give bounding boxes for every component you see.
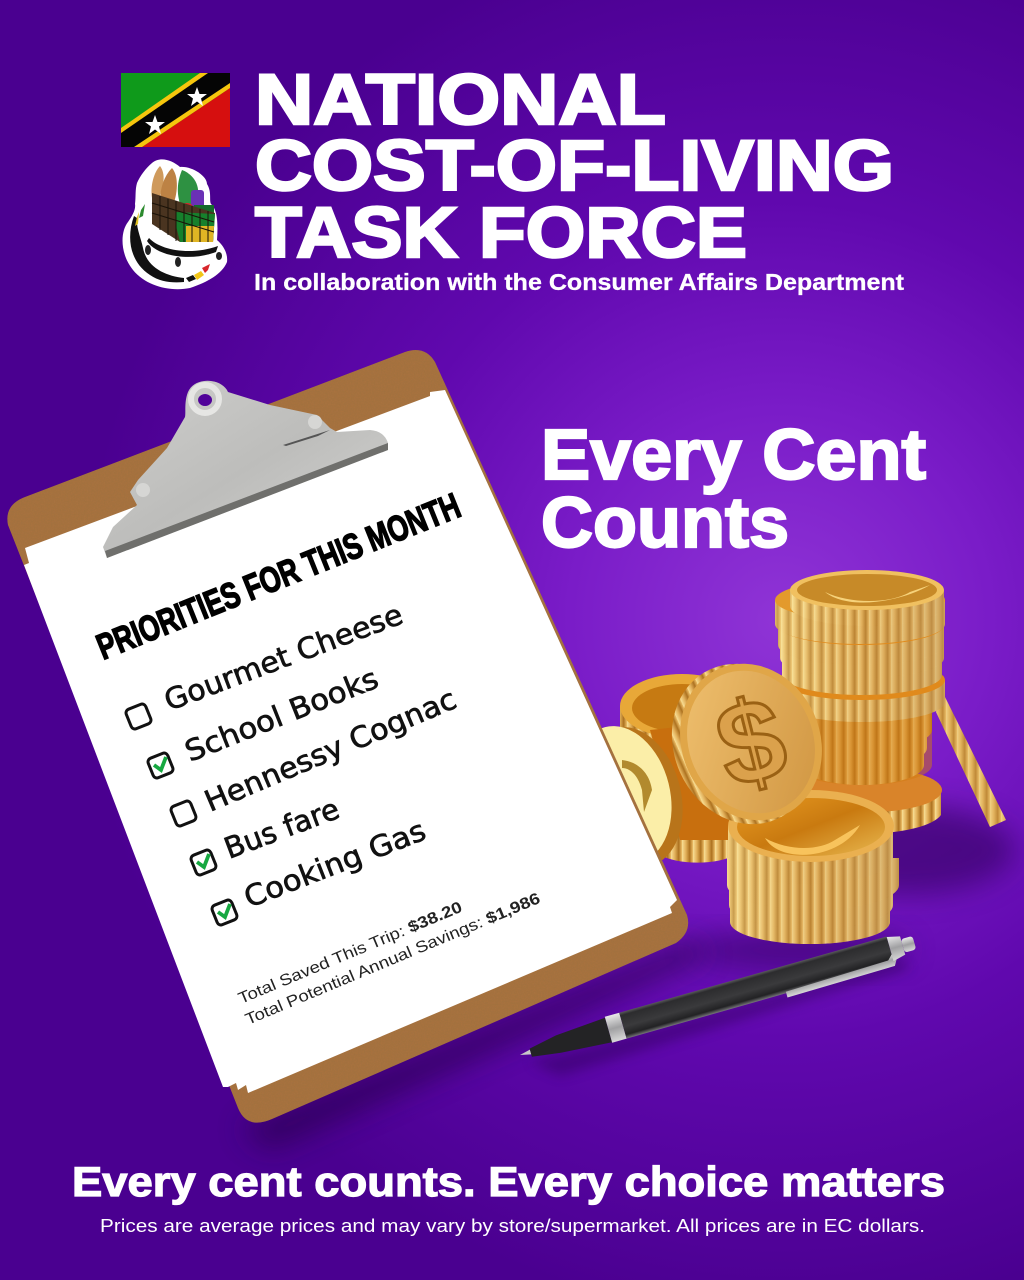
footer tagline: Every cent counts. Every choice matters	[72, 1158, 945, 1205]
header	[121, 61, 904, 295]
checklist item: School Books: School Books	[180, 661, 383, 769]
footer disclaimer: Prices are average prices and may vary by store/supermarket. All prices are in EC dollars.	[100, 1216, 925, 1236]
checklist heading: PRIORITIES FOR THIS MONTH	[91, 485, 466, 667]
coins: main tall stack	[775, 570, 945, 833]
illustration: gold coins	[558, 570, 1006, 944]
coin: large dollar coin	[647, 641, 847, 847]
clipboard paper	[24, 390, 677, 1093]
clipboard board	[7, 350, 688, 1123]
pen	[516, 930, 919, 1072]
subtitle: In collaboration with the Consumer Affairs Department	[254, 269, 904, 295]
title	[255, 61, 894, 273]
clip	[103, 381, 388, 558]
title: NATIONAL	[255, 61, 666, 140]
title: TASK FORCE	[255, 194, 747, 273]
title: COST-OF-LIVING	[255, 127, 894, 206]
icon: shopping cart logo	[123, 159, 227, 289]
coins: left back coins	[558, 674, 744, 878]
checklist item: Cooking Gas: Cooking Gas	[239, 813, 430, 915]
savings totals: Total Saved This Trip: $38.20	[236, 899, 465, 1008]
checklist item: Bus fare: Bus fare	[220, 792, 344, 866]
icon: Saint Kitts and Nevis flag	[121, 73, 230, 147]
heading: Every Cent Counts: Every Cent	[541, 416, 926, 495]
savings totals: Total Potential Annual Savings: $1,986	[243, 890, 543, 1029]
checklist item: Gourmet Cheese: Gourmet Cheese	[160, 597, 407, 718]
coins: front small stack	[727, 790, 899, 944]
shadows	[240, 805, 1015, 1150]
coin: leaning coin	[936, 693, 1006, 827]
checklist item: Hennessy Cognac: Hennessy Cognac	[199, 682, 461, 818]
clipboard	[7, 350, 688, 1123]
heading: Every Cent Counts: Counts	[541, 484, 789, 563]
heading: Every Cent Counts	[541, 416, 926, 563]
coin: large dollar coin: $	[704, 671, 798, 813]
